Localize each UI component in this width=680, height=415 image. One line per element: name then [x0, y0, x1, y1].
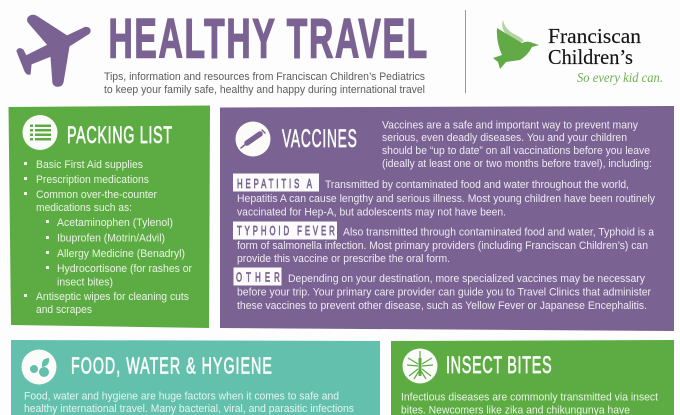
section: other: OTHER — [236, 271, 280, 285]
bullet list: Allergy Medicine (Benadryl) — [57, 248, 185, 260]
subtitle — [104, 71, 425, 96]
bullet list — [24, 159, 192, 316]
heading: food, water and hygiene: FOOD, WATER & HYGIENE — [71, 354, 272, 380]
intro text — [382, 120, 652, 170]
section: hepatitis A — [233, 174, 655, 218]
section: other: before your trip. Your primary care provider can guide you to Travel Clinics that administer — [237, 286, 651, 298]
bullet list: and scrapes — [36, 304, 92, 316]
bullet list: Ibuprofen (Motrin/Advil) — [57, 232, 165, 244]
body text — [24, 390, 354, 415]
subtitle: Tips, information and resources from Franciscan Children’s Pediatrics — [104, 71, 425, 83]
title: HEALTHY TRAVEL — [108, 6, 427, 69]
logo: Franciscan Children's: Franciscan — [548, 24, 642, 48]
heading: vaccines: VACCINES — [282, 126, 357, 153]
icon: water drops — [22, 350, 56, 384]
panel: food, water and hygiene — [11, 340, 380, 415]
subtitle: to keep your family safe, healthy and happy during international travel — [104, 84, 425, 96]
section: typhoid fever: Also transmitted through contaminated food and water, Typhoid is a — [343, 226, 655, 238]
icon: list — [22, 115, 58, 150]
section: hepatitis A: Hepatitis A can cause lengthy and serious illness. Most young children have been routinely — [237, 193, 655, 205]
section: hepatitis A: vaccinated for Hep-A, but adolescents may not have been. — [237, 206, 506, 218]
section: typhoid fever — [233, 222, 655, 265]
body text: healthy international travel. Many bacterial, viral, and parasitic infections — [24, 403, 354, 415]
section: hepatitis A: HEPATITIS A — [237, 177, 313, 192]
bullet list: medications such as: — [36, 202, 132, 214]
body text: Infectious diseases are commonly transmitted via insect — [401, 392, 658, 404]
section: other: these vaccines to prevent other disease, such as Yellow Fever or Japanese Encephalitis. — [237, 300, 647, 312]
icon: syringe — [236, 122, 270, 156]
section: hepatitis A: Transmitted by contaminated food and water throughout the world, — [325, 179, 629, 191]
panel: vaccines — [220, 106, 674, 331]
logo: Franciscan Children's: Children’s — [548, 45, 633, 69]
icon: mosquito — [402, 348, 438, 384]
section: typhoid fever: TYPHOID FEVER — [237, 224, 335, 239]
section: typhoid fever: form of salmonella infection. Most primary providers (including Franciscan Children’s) can — [237, 240, 648, 252]
bullet list: Prescription medications — [36, 174, 149, 186]
bullet list: Common over-the-counter — [36, 189, 157, 201]
body text: Food, water and hygiene are huge factors when it comes to safe and — [24, 390, 339, 402]
bullet list: Hydrocortisone (for rashes or — [57, 263, 192, 275]
logo: Franciscan Children's — [493, 20, 663, 86]
intro text: should be “up to date” on all vaccinations before you leave — [382, 145, 650, 157]
bullet list: Antiseptic wipes for cleaning cuts — [36, 291, 189, 303]
section: other — [234, 268, 651, 312]
intro text: serious, even deadly diseases. You and your children — [382, 132, 627, 144]
section: other: Depending on your destination, more specialized vaccines may be necessary — [288, 273, 645, 285]
bullet list: insect bites) — [57, 276, 113, 288]
body text — [401, 392, 658, 415]
bullet list: Basic First Aid supplies — [36, 159, 143, 171]
logo: Franciscan Children's: So every kid can. — [577, 71, 663, 86]
bullet list: Acetaminophen (Tylenol) — [57, 217, 173, 229]
section: typhoid fever: provide this vaccine or prescribe the oral form. — [237, 253, 450, 265]
intro text: Vaccines are a safe and important way to prevent many — [382, 120, 638, 132]
heading: packing list: PACKING LIST — [67, 122, 172, 149]
panel: insect bites — [391, 340, 674, 415]
icon: dove — [493, 20, 539, 69]
intro text: (ideally at least one or two months before travel), including: — [382, 158, 652, 170]
heading: insect bites: INSECT BITES — [446, 352, 552, 379]
icon: airplane — [17, 15, 90, 86]
panel: packing list — [8, 106, 210, 328]
